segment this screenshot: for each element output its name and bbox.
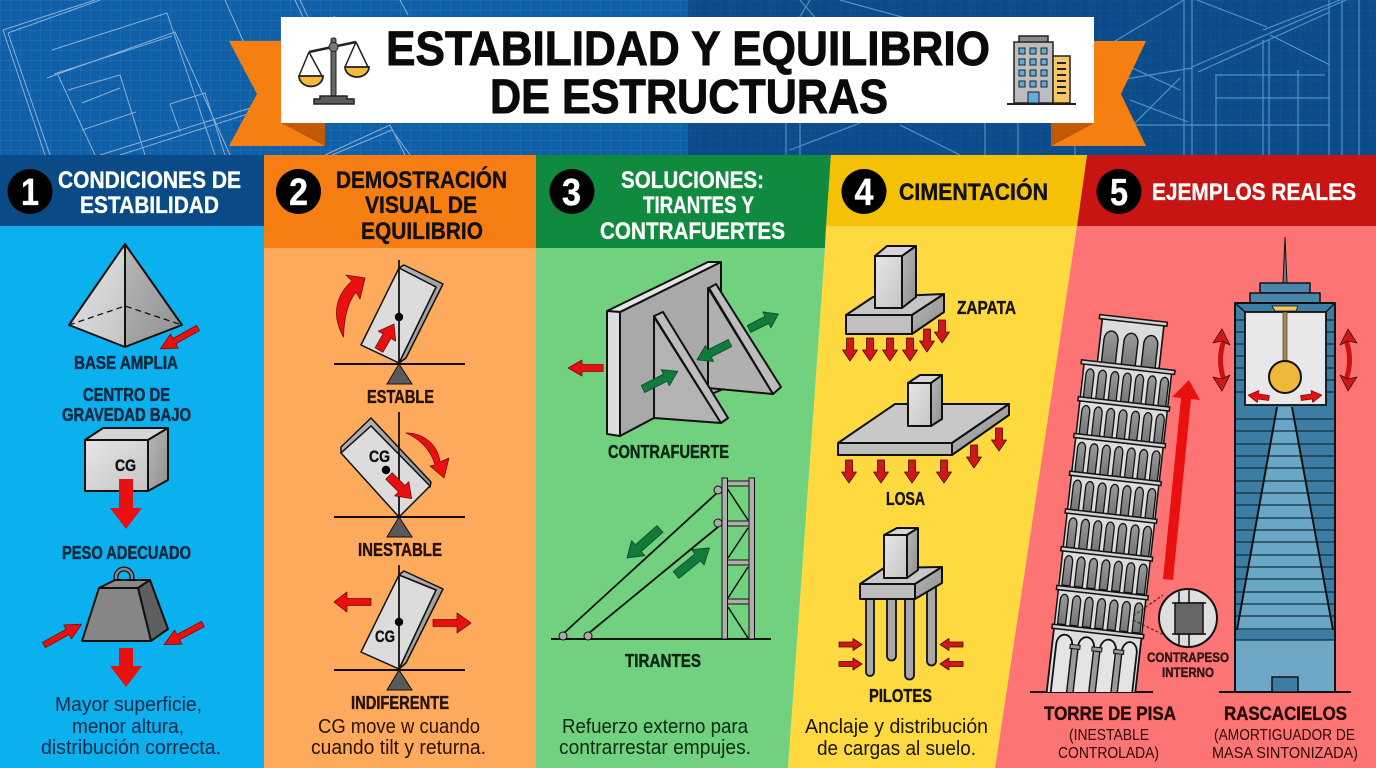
callout: contrapeso interno: CONTRAPESO: [1147, 649, 1229, 665]
label: inestable: INESTABLE: [358, 540, 442, 560]
section header 5: 5: [1110, 172, 1128, 214]
diagram: weight: [40, 569, 207, 687]
text: condiciones description: Mayor superficie,: [55, 694, 202, 716]
panel: soluciones tirantes y contrafuertes: [536, 155, 831, 768]
label: centro de gravedad bajo: [62, 385, 191, 425]
ribbon: right: [1051, 41, 1146, 146]
text: equilibrio description: [311, 716, 486, 759]
label: rascacielos: MASA SINTONIZADA): [1212, 745, 1358, 762]
header banner: [0, 0, 1376, 155]
icon: building: [1007, 36, 1076, 104]
section header 1: ESTABILIDAD: [80, 192, 219, 219]
panel: condiciones de estabilidad: [0, 155, 264, 768]
diagram: losa: [838, 375, 1009, 483]
panel: demostracion visual de equilibrio: [264, 155, 536, 768]
label: base amplia: BASE AMPLIA: [74, 353, 178, 373]
panel: ejemplos reales: [995, 155, 1376, 768]
diagram: indiferente: [334, 565, 471, 690]
section header 2: DEMOSTRACIÓN: [336, 166, 507, 194]
text: cimentacion description: [805, 716, 988, 760]
label: torre de pisa: (INESTABLE: [1069, 727, 1149, 744]
title panel: [281, 17, 1094, 124]
text: equilibrio description: cuando tilt y returna.: [311, 737, 486, 759]
text: condiciones description: [41, 694, 221, 759]
section header 1: 1: [21, 172, 39, 214]
section header 4: 4: [854, 172, 874, 214]
text: cimentacion description: Anclaje y distribución: [805, 716, 988, 738]
section header 4: [826, 155, 1087, 226]
section header 3: CONTRAFUERTES: [600, 218, 785, 245]
icon: balance scale: [299, 38, 369, 104]
label: torre de pisa: TORRE DE PISA: [1044, 704, 1176, 725]
label: losa: LOSA: [886, 489, 925, 509]
section header 2: EQUILIBRIO: [361, 218, 483, 245]
label: estable: ESTABLE: [367, 387, 434, 407]
diagram: indiferente: CG: [375, 627, 395, 646]
section header 3: [536, 155, 831, 248]
title: DE ESTRUCTURAS: [490, 71, 888, 124]
section header 3: TIRANTES Y: [643, 192, 754, 219]
text: cimentacion description: de cargas al suelo.: [817, 738, 976, 760]
diagram: rascacielos: [1213, 237, 1357, 692]
title: ESTABILIDAD Y EQUILIBRIO: [386, 23, 990, 76]
label: pilotes: PILOTES: [869, 686, 932, 706]
diagram: torre de pisa: [1030, 313, 1229, 711]
diagram: cube with CG: CG: [115, 456, 136, 475]
label: tirantes: TIRANTES: [625, 651, 701, 671]
text: condiciones description: menor altura,: [72, 716, 184, 738]
diagram: estable: [334, 260, 465, 384]
ribbon: left: [229, 41, 325, 146]
label: centro de gravedad bajo: GRAVEDAD BAJO: [62, 405, 191, 425]
text: equilibrio description: CG move w cuando: [318, 716, 480, 738]
diagram: cube with CG: [85, 428, 168, 529]
diagram: pilotes: [839, 528, 963, 680]
section header 5: [1077, 155, 1376, 226]
label: zapata: ZAPATA: [957, 298, 1016, 318]
diagram: tirantes: [551, 478, 771, 640]
panel: cimentacion: [788, 155, 1087, 768]
text: condiciones description: distribución correcta.: [41, 737, 221, 759]
section header 2: VISUAL DE: [365, 192, 477, 219]
section header 3: SOLUCIONES:: [621, 167, 764, 194]
section header 2: 2: [289, 172, 308, 214]
label: rascacielos: (AMORTIGUADOR DE: [1214, 727, 1355, 744]
title: [386, 23, 990, 124]
label: rascacielos: RASCACIELOS: [1224, 704, 1347, 725]
text: soluciones description: [559, 716, 751, 759]
label: rascacielos: [1212, 704, 1358, 762]
diagram: contrafuerte: [568, 262, 782, 436]
label: torre de pisa: CONTROLADA): [1058, 745, 1159, 762]
diagram: pyramid base amplia: [69, 244, 202, 356]
callout: contrapeso interno: [1133, 585, 1229, 680]
callout: contrapeso interno: INTERNO: [1162, 664, 1214, 680]
label: torre de pisa: [1044, 704, 1176, 762]
section header 1: [0, 155, 264, 226]
label: peso adecuado: PESO ADECUADO: [62, 543, 191, 563]
section header 1: CONDICIONES DE: [58, 167, 241, 194]
section header 3: 3: [562, 172, 581, 214]
section header 4: CIMENTACIÓN: [899, 178, 1048, 206]
diagram: zapata: [842, 246, 950, 361]
label: contrafuerte: CONTRAFUERTE: [608, 442, 729, 462]
diagram: inestable: [334, 412, 465, 537]
label: indiferente: INDIFERENTE: [351, 693, 449, 713]
text: soluciones description: contrarrestar empujes.: [559, 737, 751, 759]
label: centro de gravedad bajo: CENTRO DE: [83, 385, 170, 405]
text: soluciones description: Refuerzo externo para: [562, 716, 749, 738]
section header 2: [264, 155, 536, 248]
icon: tuned mass damper: [1269, 361, 1301, 393]
diagram: inestable: CG: [369, 447, 390, 466]
